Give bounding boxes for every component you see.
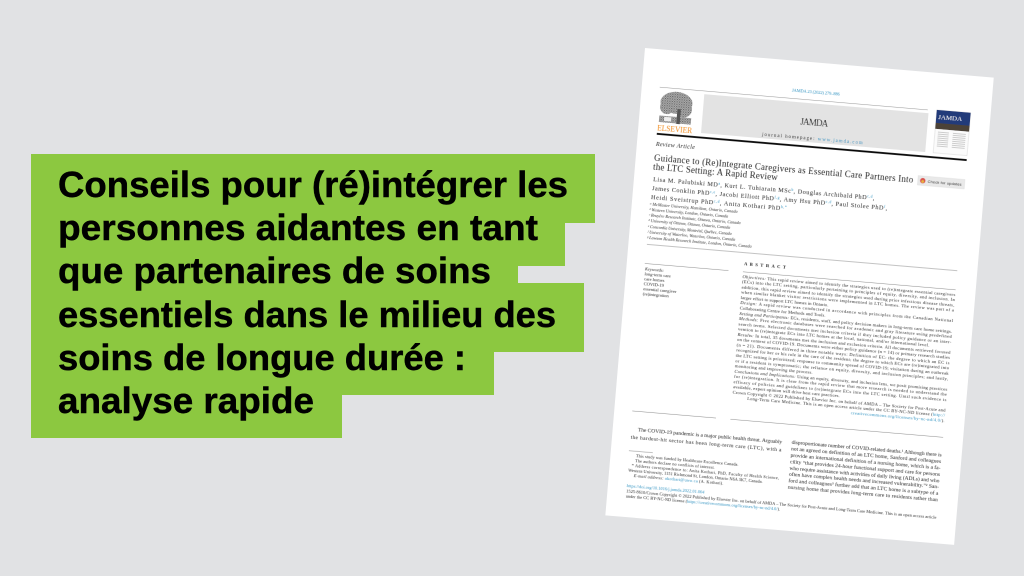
abstract text: on the context of COVID-19. Documents were either policy guidance (n = 14) or primary research studies [737, 337, 950, 360]
author affiliations: ᵉ Concordia University, Montréal, Québec, Canada [648, 224, 732, 237]
article title: the LTC Setting: A Rapid Review [653, 162, 779, 182]
authors: , Amy Hsu PhD [780, 196, 826, 207]
abstract text: available, expert opinion will drive best care practices. [733, 384, 840, 399]
authors [651, 176, 889, 221]
body text: left column: the hardest-hit sector has been long-term care (LTC), with a [630, 434, 782, 454]
body text: right column: nursing home that provides long-term care to residents rather than [788, 485, 938, 503]
abstract text: Results: In total, 35 documents met the inclusion and exclusion criteria. All documents retrieved focused [736, 332, 951, 356]
authors: , [885, 205, 888, 212]
footnotes: E-mail address: akothari@uwo.ca (A. Kothari). [633, 473, 724, 486]
title text: essentiels dans le milieu des [58, 294, 556, 335]
keywords [642, 266, 679, 299]
body text: right column: provide an international definition of a nursing home, which is a fa- [790, 452, 941, 471]
footnotes: This study was funded by Healthcare Excellence Canada. [636, 453, 739, 467]
icon: Elsevier logo [657, 90, 696, 135]
author affiliations: ᵃ McMaster University, Hamilton, Ontario, Canada [650, 201, 738, 215]
authors: f,g [774, 195, 780, 201]
keywords: COVID-19 [643, 281, 665, 288]
footnotes: 1525-8610/Crown Copyright © 2022 Published by Elsevier Inc. on behalf of AMDA – The Society for Post-Acute and Long-Term Care Medicine. This is an open access article [626, 488, 937, 520]
abstract text: when similar blanket visitor restrictions were implemented in LTC homes. The review was part of a [741, 290, 954, 313]
body text: right column [788, 439, 942, 504]
abstract text: Methods: Five electronic databases were searched for academic and gray literature using predefined [738, 316, 953, 339]
abstract text [731, 274, 956, 423]
icon: check for updates badge: Check for updates [928, 179, 962, 187]
authors: , Paul Stolee PhD [831, 200, 884, 212]
body text: right column: who require assistance with activities of daily living (ADLs) and who [789, 465, 940, 484]
abstract text: Long-Term Care Medicine. This is an open access article under the CC BY-NC-ND license (http:// [747, 396, 946, 418]
author affiliations: ᵇ Western University, London, Ontario, Canada [649, 207, 728, 220]
body text: left column: The COVID-19 pandemic is a major public health threat. Arguably [638, 427, 783, 446]
abstract text: (ECs) into the LTC setting, particularly pertaining to principles of equity, diversity, and inclusion. In [742, 279, 956, 303]
keywords: (re)integration [643, 291, 670, 298]
footnotes: https://doi.org/10.1016/j.jamda.2022.01.004 [627, 483, 706, 495]
footnotes: The authors declare no conflicts of interest. [635, 458, 715, 470]
author affiliations: ᵈ University of Ottawa, Ottawa, Ontario, Canada [648, 218, 730, 231]
abstract text: recognized for her or his role in the care of the resident; the degree to which ECs are (re)integrated into [736, 348, 950, 371]
keywords: Keywords: [644, 266, 665, 273]
article type: Review Article [655, 142, 695, 151]
body text: left column [630, 427, 783, 454]
icon: journal cover thumbnail: JAMDA [938, 114, 963, 123]
abstract text: Conclusions and Implications: Using an equity, diversity, and inclusion lens, we posit promising practices [734, 369, 948, 393]
abstract text: creativecommons.org/licenses/by-nc-nd/4.0/). [851, 410, 945, 423]
journal header band: journal homepage: www.jamda.com [761, 133, 863, 146]
title text: Conseils pour (ré)intégrer les [58, 164, 568, 205]
icon: check for updates badge [917, 176, 965, 189]
author affiliations [647, 201, 755, 250]
panel: green stepped title block [31, 154, 595, 438]
icon: journal cover thumbnail [933, 110, 971, 156]
authors: c,d [826, 200, 832, 205]
keywords: long-term care [644, 271, 671, 278]
keywords: essential caregiver [643, 286, 677, 294]
title text: que partenaires de soins [58, 250, 491, 291]
authors: , Kurt L. Tuhiarain MSc [720, 182, 791, 195]
title text: analyse rapide [58, 380, 314, 421]
title text [58, 164, 568, 421]
abstract text: (n = 21). Documents differed in three notable ways: Definition of EC: the degree to which an EC is [737, 342, 950, 365]
keywords: care homes [644, 276, 665, 283]
authors: c,d [714, 199, 720, 205]
authors: a [718, 182, 721, 186]
footnotes: Western University, 1151 Richmond St, London, Ontario N6A 3K7, Canada. [628, 468, 763, 485]
body text: right column: often have complex health needs and increased vulnerability.”² San- [789, 471, 939, 491]
authors: f [884, 205, 886, 209]
abstract text: Crown Copyright © 2022 Published by Elsevier Inc. on behalf of AMDA – The Society for Post-Acute and [733, 390, 946, 413]
authors: , Anita Kothari PhD [720, 200, 781, 212]
abstract text: addition, this rapid review aimed to identify the strategies used during prior infectious disease threats, [741, 284, 955, 308]
abstract text: larger effort to support LTC homes in Ontario. [741, 295, 829, 307]
abstract text: vention to (re)integrate ECs into LTC homes at the local, national, and/or international level. [738, 326, 930, 349]
abstract text: search terms. Selected documents met inclusion criteria if they included policy guidance or an inter- [738, 321, 952, 344]
abstract text: or if a resident is symptomatic; the reliance on equity, diversity, and inclusion principles; and lastly, [735, 358, 948, 382]
authors: , [873, 195, 875, 202]
authors: Lisa M. Palubiski MD [653, 176, 718, 189]
journal header band: JAMDA [800, 116, 829, 129]
authors: Heidi Sveistrup PhD [651, 194, 713, 206]
article title: Guidance to (Re)Integrate Caregivers as Essential Care Partners Into [654, 152, 914, 184]
footnotes [626, 453, 940, 525]
authors: c,e [710, 190, 716, 195]
panel: tilted journal article page [605, 48, 994, 545]
author affiliations: ᶠ University of Waterloo, Waterloo, Ontario, Canada [647, 229, 735, 243]
authors: c,d [867, 194, 873, 200]
abstract heading: A B S T R A C T [744, 261, 786, 270]
body text: right column: ford and colleagues³ further add that an LTC home is a subtype of a [788, 477, 939, 497]
authors: James Conklin PhD [652, 185, 710, 197]
abstract text: Design: A rapid review was conducted in accordance with principles from the Canadian National [739, 300, 954, 323]
author affiliations: ᶜ Bruyère Research Institute, Ottawa, Ontario, Canada [649, 213, 741, 226]
journal citation: JAMDA 23 (2022) 279–886 [792, 88, 841, 97]
abstract text: Setting and Participants: ECs, residents, staff, and policy decision makers in long-term care home settings. [739, 311, 952, 335]
journal header band [701, 94, 929, 152]
abstract text: Collaborating Centre for Methods and Tools. [740, 305, 826, 318]
footnotes: under the CC BY-NC-ND license (https://creativecommons.org/licenses/by-nc-nd/4.0/). [626, 494, 780, 512]
title text: personnes aidantes en tant [58, 207, 538, 248]
abstract text: monitoring and improving the process. [735, 363, 813, 375]
body text: right column: cility “that provides 24-hour functional support and care for persons [790, 458, 940, 478]
abstract text: for (re)integration. It is clear from the rapid review that more research is needed to understand the [734, 374, 947, 397]
footnotes: * Address correspondence to: Anita Kothari, PhD, Faculty of Health Science, [631, 463, 779, 481]
abstract text: Objectives: This rapid review aimed to identify the strategies used to (re)integrate essential caregivers [742, 274, 956, 297]
icon: Elsevier logo: ELSEVIER [657, 123, 693, 135]
title text: soins de longue durée : [58, 337, 466, 378]
authors: b,* [781, 205, 787, 211]
abstract text: the LTC setting is prioritized; response to community spread of COVID-19; visitation during an outbreak [736, 353, 950, 376]
abstract text: efficacy of policies and guidelines to (re)integrate ECs into the LTC setting. Until such evidence is [733, 379, 947, 402]
authors: b [791, 188, 794, 192]
author affiliations: ᵍ Lawson Health Research Institute, London, Ontario, Canada [647, 235, 752, 250]
body text: right column: disproportionate number of COVID-related deaths.¹ Although there is [791, 439, 942, 459]
authors: , Jacobi Elliott PhD [715, 191, 775, 202]
body text: right column: not an agreed on definition of an LTC home, Sanford and colleagues [791, 445, 941, 465]
authors: , Douglas Archibald PhD [793, 188, 867, 201]
